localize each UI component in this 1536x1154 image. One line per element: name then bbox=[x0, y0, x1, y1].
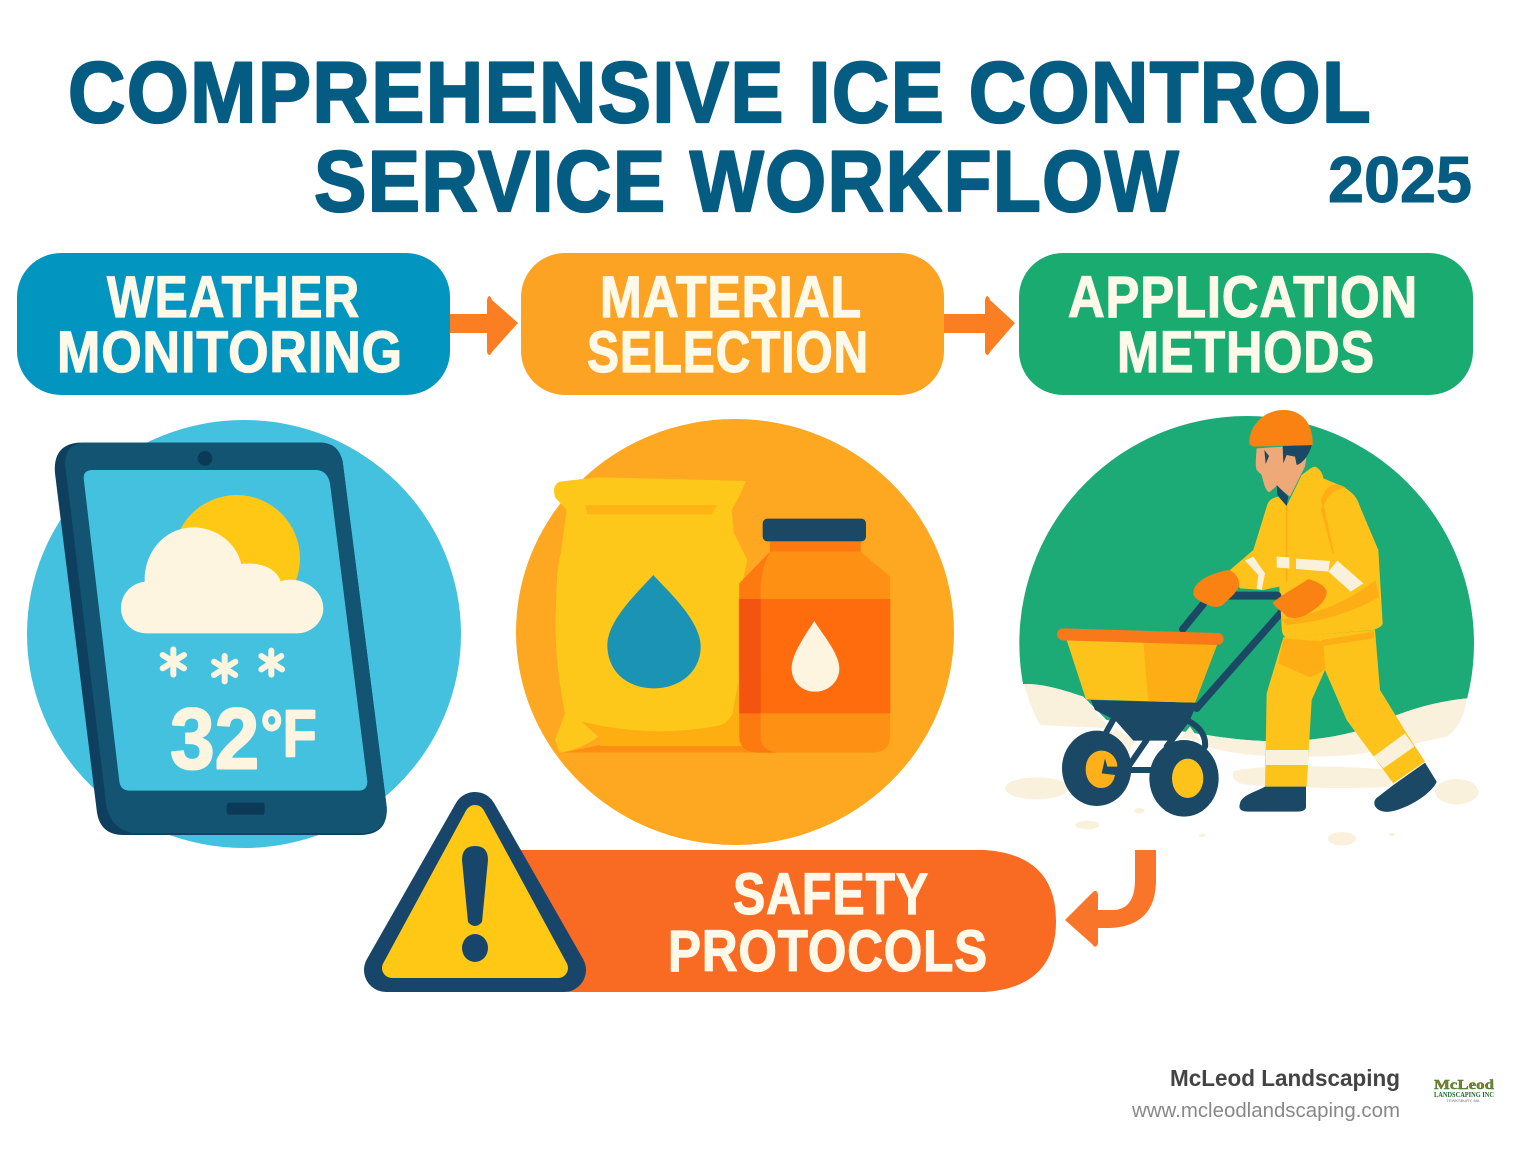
orange circle backdrop bbox=[516, 419, 954, 845]
icon: warning triangle bbox=[386, 814, 564, 970]
step: material selection pill: SELECTION bbox=[587, 320, 869, 385]
blue drop bbox=[607, 575, 701, 688]
jar label bbox=[739, 599, 890, 713]
spreader bbox=[1062, 604, 1283, 817]
logo: McLeod Landscaping Inc: McLeod bbox=[1434, 1078, 1494, 1093]
year label: 2025 bbox=[1328, 143, 1472, 216]
worker bbox=[1193, 410, 1437, 812]
logo: McLeod Landscaping Inc: TEWKSBURY, MA bbox=[1447, 1098, 1480, 1103]
step: weather monitoring pill: WEATHER bbox=[107, 265, 360, 330]
blue circle backdrop bbox=[27, 420, 461, 848]
hair bbox=[1264, 445, 1312, 465]
step: material selection pill: MATERIAL bbox=[600, 265, 862, 330]
title bbox=[68, 45, 1372, 230]
temperature reading bbox=[170, 692, 317, 788]
ground snow bbox=[1005, 766, 1478, 845]
snowflakes bbox=[163, 649, 282, 681]
step: safety protocols pill: PROTOCOLS bbox=[668, 919, 988, 984]
footer: company name: McLeod Landscaping bbox=[1170, 1065, 1400, 1091]
trousers bbox=[1265, 630, 1425, 787]
temperature reading: 32 bbox=[170, 692, 259, 788]
step: safety protocols pill: SAFETY bbox=[733, 862, 929, 927]
step: weather monitoring pill: MONITORING bbox=[57, 320, 403, 385]
arrow: application back to safety bbox=[1065, 850, 1156, 947]
logo: McLeod Landscaping Inc: LANDSCAPING INC bbox=[1434, 1090, 1494, 1099]
face bbox=[1256, 445, 1308, 497]
hopper bbox=[1067, 640, 1217, 703]
tablet bbox=[55, 443, 387, 835]
temperature reading: °F bbox=[261, 696, 317, 770]
illustration: worker with spreader bbox=[1005, 410, 1478, 871]
screen bbox=[84, 470, 367, 791]
cloud bbox=[121, 527, 323, 633]
spreader frame bbox=[1100, 604, 1283, 770]
jacket collar bbox=[1277, 485, 1288, 506]
step: application methods pill: METHODS bbox=[1117, 320, 1375, 385]
cream drop bbox=[792, 621, 839, 692]
arrow: material to application bbox=[944, 296, 1015, 355]
hopper rim bbox=[1063, 634, 1218, 639]
trouser reflective bands bbox=[1266, 733, 1414, 768]
exclamation mark bbox=[462, 846, 488, 926]
right wheel bbox=[1149, 740, 1219, 817]
camera bbox=[198, 451, 212, 466]
illustration: de-icing materials bbox=[516, 419, 954, 845]
step: safety protocols pill bbox=[500, 850, 1056, 992]
home button bbox=[227, 803, 265, 815]
push handle bbox=[1221, 584, 1277, 608]
jacket bbox=[1230, 467, 1383, 637]
bag bbox=[554, 477, 747, 753]
snow bank bbox=[1024, 684, 1467, 757]
logo: McLeod Landscaping Inc bbox=[1434, 1078, 1494, 1103]
jar lid bbox=[763, 519, 866, 541]
jacket reflective bands bbox=[1245, 557, 1363, 592]
illustration: weather tablet bbox=[27, 420, 461, 848]
shelf shadow bbox=[563, 745, 777, 753]
jar bbox=[739, 519, 890, 753]
hopper base bbox=[1091, 700, 1197, 741]
right glove bbox=[1273, 579, 1327, 618]
green circle backdrop bbox=[1019, 416, 1474, 741]
left wheel bbox=[1062, 731, 1131, 806]
step: material selection pill bbox=[521, 253, 944, 395]
title: COMPREHENSIVE ICE CONTROL bbox=[68, 45, 1372, 141]
helmet bbox=[1249, 410, 1313, 447]
boots bbox=[1239, 763, 1437, 812]
step: application methods pill: APPLICATION bbox=[1068, 265, 1418, 330]
step: application methods pill bbox=[1019, 253, 1473, 395]
step: weather monitoring pill bbox=[17, 253, 450, 395]
footer: website: www.mcleodlandscaping.com bbox=[1131, 1100, 1400, 1122]
sun bbox=[173, 495, 300, 622]
title: SERVICE WORKFLOW bbox=[314, 134, 1180, 230]
left glove bbox=[1193, 570, 1239, 607]
arrow: weather to material bbox=[450, 296, 518, 355]
